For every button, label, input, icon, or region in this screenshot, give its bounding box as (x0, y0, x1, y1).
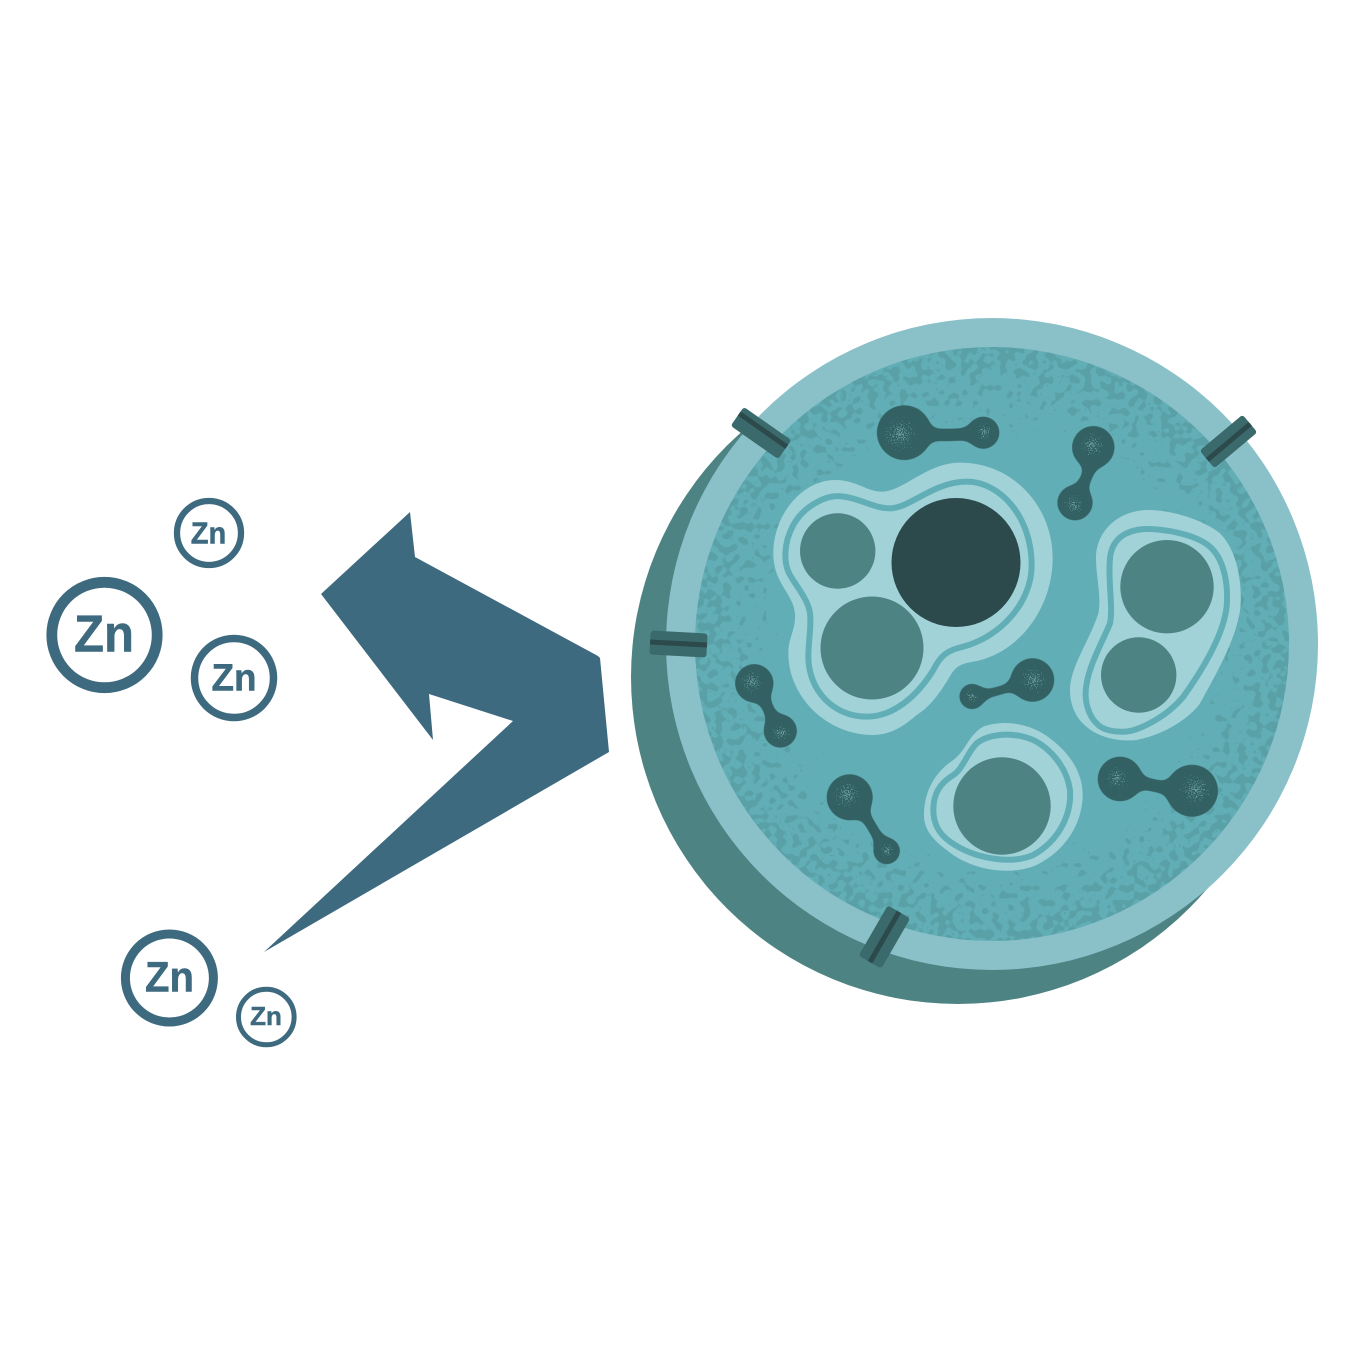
channel left (649, 631, 708, 657)
zinc ion large (52, 582, 157, 688)
cytoplasm stipple texture (695, 347, 1289, 941)
cell (631, 318, 1318, 1004)
zinc ion small (238, 989, 294, 1045)
vesicle body (924, 723, 1083, 871)
vesicle body (1070, 510, 1241, 740)
vesicle inner ring (1086, 529, 1227, 732)
organelle: large vesicle with three granules (773, 463, 1053, 735)
cell shadow (631, 350, 1285, 1004)
lower granule (1101, 637, 1176, 713)
dark granule (892, 498, 1020, 627)
zinc ions (52, 501, 294, 1045)
organelle: lower vesicle with one granule (924, 723, 1083, 871)
zinc ion small: Zn (250, 1001, 282, 1031)
membrane channels (649, 407, 1257, 969)
zinc ion large: Zn (74, 606, 134, 664)
arrow (264, 512, 609, 952)
medium granule (820, 596, 924, 700)
upper granule (1120, 540, 1214, 633)
vesicle body (773, 463, 1053, 735)
granule (953, 757, 1051, 855)
zinc ion top (177, 501, 241, 565)
zinc ion middle: Zn (212, 657, 256, 699)
vesicle inner ring (785, 482, 1032, 717)
zinc ion lower (125, 934, 213, 1022)
zinc ion lower: Zn (145, 954, 194, 1002)
zinc ion middle (194, 638, 274, 718)
small granule (800, 513, 875, 589)
channel bottom (859, 905, 910, 969)
organelle: right vesicle with two granules (1070, 510, 1241, 740)
zinc ion top: Zn (191, 515, 226, 550)
cell membrane (666, 318, 1318, 970)
molecule silhouettes (735, 406, 1218, 864)
vesicle inner ring (933, 735, 1070, 860)
channel top left (731, 407, 791, 459)
molecule speckles (738, 413, 1216, 861)
channel top right (1200, 415, 1257, 468)
molecules (735, 406, 1218, 864)
cell cytoplasm (695, 347, 1289, 941)
